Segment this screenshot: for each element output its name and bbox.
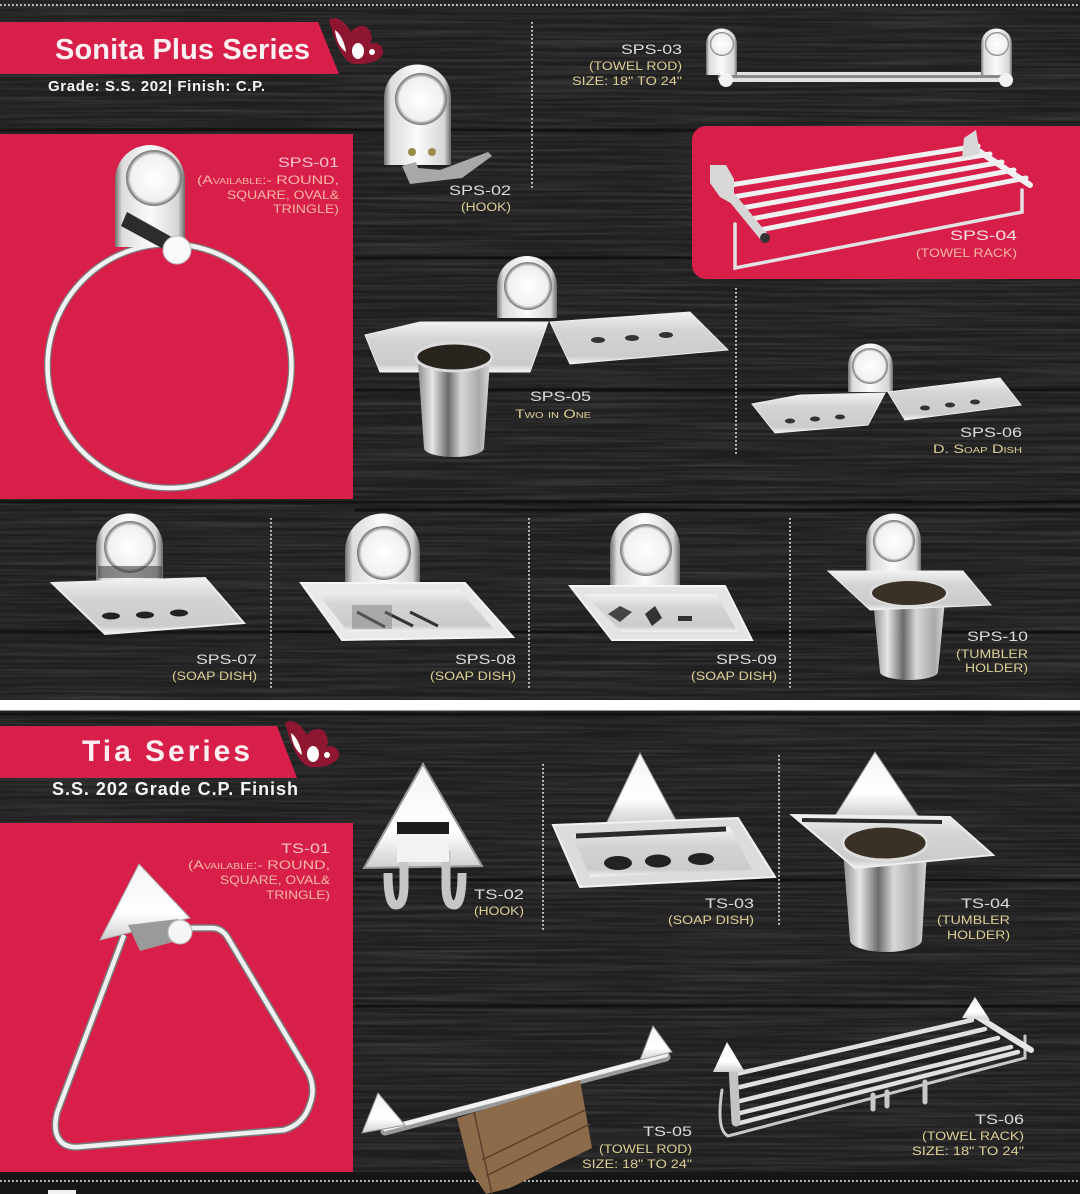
label: SPS-05 bbox=[515, 388, 591, 421]
label: SPS-06: D. Soap Dish bbox=[933, 444, 1022, 456]
panel: SPS-01 red background bbox=[0, 134, 353, 499]
label: SPS-03: SPS-03 bbox=[621, 41, 682, 57]
label: TS-06: SIZE: 18" TO 24" bbox=[912, 1146, 1024, 1158]
label: TS-02: TS-02 bbox=[474, 886, 524, 902]
label: SPS-06 bbox=[933, 424, 1022, 456]
label: TS-03: (SOAP DISH) bbox=[668, 915, 754, 927]
label: SPS-09 bbox=[691, 651, 777, 683]
label: SPS-02: (HOOK) bbox=[461, 202, 511, 214]
product: SPS-09 soap dish bbox=[570, 513, 752, 640]
label: SPS-03: SIZE: 18" TO 24" bbox=[572, 76, 682, 88]
label: SPS-03 bbox=[572, 41, 682, 88]
label: TS-03: TS-03 bbox=[705, 895, 754, 911]
product: SPS-04 towel rack bbox=[710, 130, 1030, 268]
subheading: grade and finish: Grade: S.S. 202| Finish: C.P. bbox=[48, 78, 265, 95]
label: TS-01 bbox=[188, 840, 330, 902]
label: TS-01: TS-01 bbox=[281, 840, 330, 856]
label: TS-03 bbox=[668, 895, 754, 927]
product: SPS-10 tumbler holder bbox=[828, 514, 991, 680]
label: SPS-05: Two in One bbox=[515, 409, 591, 421]
product: SPS-02 hook bbox=[384, 64, 492, 184]
label: SPS-01 bbox=[197, 154, 339, 216]
label: TS-05: TS-05 bbox=[643, 1123, 692, 1139]
label: TS-01: (Available:- ROUND, bbox=[188, 858, 330, 872]
label: TS-04: TS-04 bbox=[961, 895, 1010, 911]
label: SPS-04: (TOWEL RACK) bbox=[916, 246, 1017, 260]
label: TS-05: SIZE: 18" TO 24" bbox=[582, 1159, 692, 1171]
icon: butterfly logo bbox=[329, 18, 383, 64]
label: TS-06: TS-06 bbox=[975, 1111, 1024, 1127]
product: SPS-05 two in one holder bbox=[365, 256, 728, 457]
product: TS-01 triangular towel ring bbox=[55, 864, 313, 1147]
label: SPS-04 bbox=[916, 227, 1017, 260]
label: TS-02 bbox=[474, 886, 524, 918]
label: SPS-01: SPS-01 bbox=[278, 154, 339, 170]
label: SPS-10: (TUMBLER bbox=[956, 649, 1028, 661]
label: TS-06 bbox=[912, 1111, 1024, 1158]
label: TS-02: (HOOK) bbox=[474, 906, 524, 918]
product: TS-06 towel rack bbox=[713, 997, 1031, 1136]
label: TS-04: HOLDER) bbox=[947, 930, 1010, 942]
label: SPS-09: (SOAP DISH) bbox=[691, 671, 777, 683]
label: SPS-01: SQUARE, OVAL& bbox=[227, 188, 339, 202]
panel: SPS-04 red background bbox=[692, 126, 1080, 279]
panel: TS-01 red background bbox=[0, 823, 353, 1172]
label: TS-01: SQUARE, OVAL& bbox=[220, 873, 330, 887]
icon: butterfly logo bbox=[285, 721, 339, 767]
label: TS-06: (TOWEL RACK) bbox=[922, 1131, 1024, 1143]
label: SPS-07: (SOAP DISH) bbox=[172, 671, 257, 683]
label: SPS-10: HOLDER) bbox=[965, 663, 1028, 675]
label: SPS-08 bbox=[430, 651, 516, 683]
banner: Tia Series bbox=[0, 726, 297, 778]
product: TS-03 soap dish bbox=[553, 753, 775, 887]
product: TS-02 double hook bbox=[364, 764, 482, 905]
title: Sonita Plus Series: Sonita Plus Series bbox=[55, 34, 310, 66]
label: SPS-06: SPS-06 bbox=[960, 424, 1022, 440]
label: TS-04 bbox=[937, 895, 1010, 942]
label: TS-01: TRINGLE) bbox=[266, 888, 330, 902]
label: SPS-07 bbox=[172, 651, 257, 683]
label: SPS-10 bbox=[956, 628, 1028, 675]
label: SPS-03: (TOWEL ROD) bbox=[589, 61, 682, 73]
label: SPS-04: SPS-04 bbox=[950, 227, 1017, 243]
product: TS-04 tumbler holder bbox=[792, 752, 993, 952]
label: TS-05 bbox=[582, 1123, 692, 1171]
subheading: Tia grade and finish: S.S. 202 Grade C.P. Finish bbox=[52, 779, 298, 799]
label: SPS-01: TRINGLE) bbox=[273, 202, 339, 216]
banner: Sonita Plus Series bbox=[0, 22, 339, 74]
title: Tia Series: Tia Series bbox=[82, 735, 250, 768]
product: SPS-08 soap dish bbox=[301, 514, 513, 640]
product: SPS-01 towel ring bbox=[48, 145, 292, 488]
label: SPS-08: (SOAP DISH) bbox=[430, 671, 516, 683]
label: SPS-07: SPS-07 bbox=[196, 651, 257, 667]
label: SPS-01: (Available:- ROUND, bbox=[197, 173, 339, 187]
label: SPS-08: SPS-08 bbox=[455, 651, 516, 667]
label: SPS-10: SPS-10 bbox=[967, 628, 1028, 644]
label: SPS-05: SPS-05 bbox=[530, 388, 591, 404]
label: SPS-09: SPS-09 bbox=[716, 651, 777, 667]
product: TS-05 towel rod with towel bbox=[362, 1026, 672, 1194]
product: SPS-07 soap dish bbox=[52, 514, 244, 634]
product: SPS-06 double soap dish bbox=[752, 344, 1021, 433]
product: SPS-03 towel rod bbox=[706, 28, 1013, 87]
label: TS-04: (TUMBLER bbox=[937, 915, 1010, 927]
label: TS-05: (TOWEL ROD) bbox=[599, 1144, 692, 1156]
label: SPS-02: SPS-02 bbox=[449, 182, 511, 198]
label: SPS-02 bbox=[449, 182, 511, 214]
